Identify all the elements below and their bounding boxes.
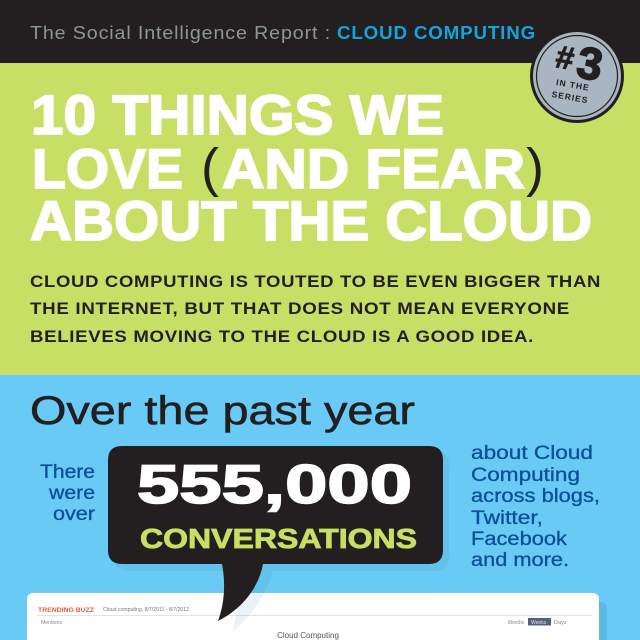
title: AND FEAR xyxy=(222,137,525,200)
trending buzz chart card: TRENDING BUZZ xyxy=(38,607,94,614)
trending buzz chart card xyxy=(27,593,607,640)
speech bubble xyxy=(108,446,443,621)
title: LOVE xyxy=(32,137,183,200)
trending buzz chart card: Months xyxy=(508,620,524,626)
trending buzz chart card: Cloud Computing xyxy=(277,631,339,640)
left text xyxy=(40,462,96,525)
trending buzz chart card: Weeks xyxy=(531,620,547,626)
left text: There xyxy=(40,462,95,483)
section heading: Over the past year xyxy=(30,389,415,433)
right text: Facebook xyxy=(471,529,568,550)
trending buzz chart card: Cloud computing, 8/7/2011 - 8/7/2012 xyxy=(103,607,189,613)
intro text: BELIEVES MOVING TO THE CLOUD IS A GOOD IDEA. xyxy=(30,328,534,346)
right text: Computing xyxy=(471,465,580,486)
header text: The Social Intelligence Report : xyxy=(30,23,331,43)
intro text xyxy=(30,273,601,346)
badge: #3 in the series xyxy=(530,29,624,123)
right text xyxy=(471,443,600,571)
title: ABOUT THE CLOUD xyxy=(30,189,592,252)
title: 10 THINGS WE xyxy=(31,83,444,146)
right text: Twitter, xyxy=(471,508,543,529)
title: ) xyxy=(526,138,544,198)
trending buzz chart card: Days xyxy=(554,620,567,626)
header text: CLOUD COMPUTING xyxy=(337,23,536,43)
badge: #3 in the series: SERIES xyxy=(551,89,589,105)
trending buzz chart card: Mentions xyxy=(41,620,62,626)
title: ( xyxy=(201,138,219,198)
badge: #3 in the series: 3 xyxy=(573,36,607,91)
panel: green intro xyxy=(0,63,640,375)
big number: 555,000 xyxy=(137,453,412,515)
right text: and more. xyxy=(471,550,569,571)
title xyxy=(30,83,592,252)
right text: across blogs, xyxy=(471,486,600,507)
right text: about Cloud xyxy=(471,443,593,464)
left text: were xyxy=(48,483,95,504)
panel: blue section xyxy=(0,375,640,640)
badge: #3 in the series: IN THE xyxy=(555,77,591,93)
intro text: CLOUD COMPUTING IS TOUTED TO BE EVEN BIGGER THAN xyxy=(30,273,601,291)
header text xyxy=(30,23,536,43)
left text: over xyxy=(53,504,96,525)
intro text: THE INTERNET, BUT THAT DOES NOT MEAN EVERYONE xyxy=(30,300,570,318)
conversations label: CONVERSATIONS xyxy=(140,523,417,554)
badge: #3 in the series: # xyxy=(553,38,577,77)
panel: header band xyxy=(0,0,640,63)
speech bubble shadow xyxy=(114,452,449,632)
